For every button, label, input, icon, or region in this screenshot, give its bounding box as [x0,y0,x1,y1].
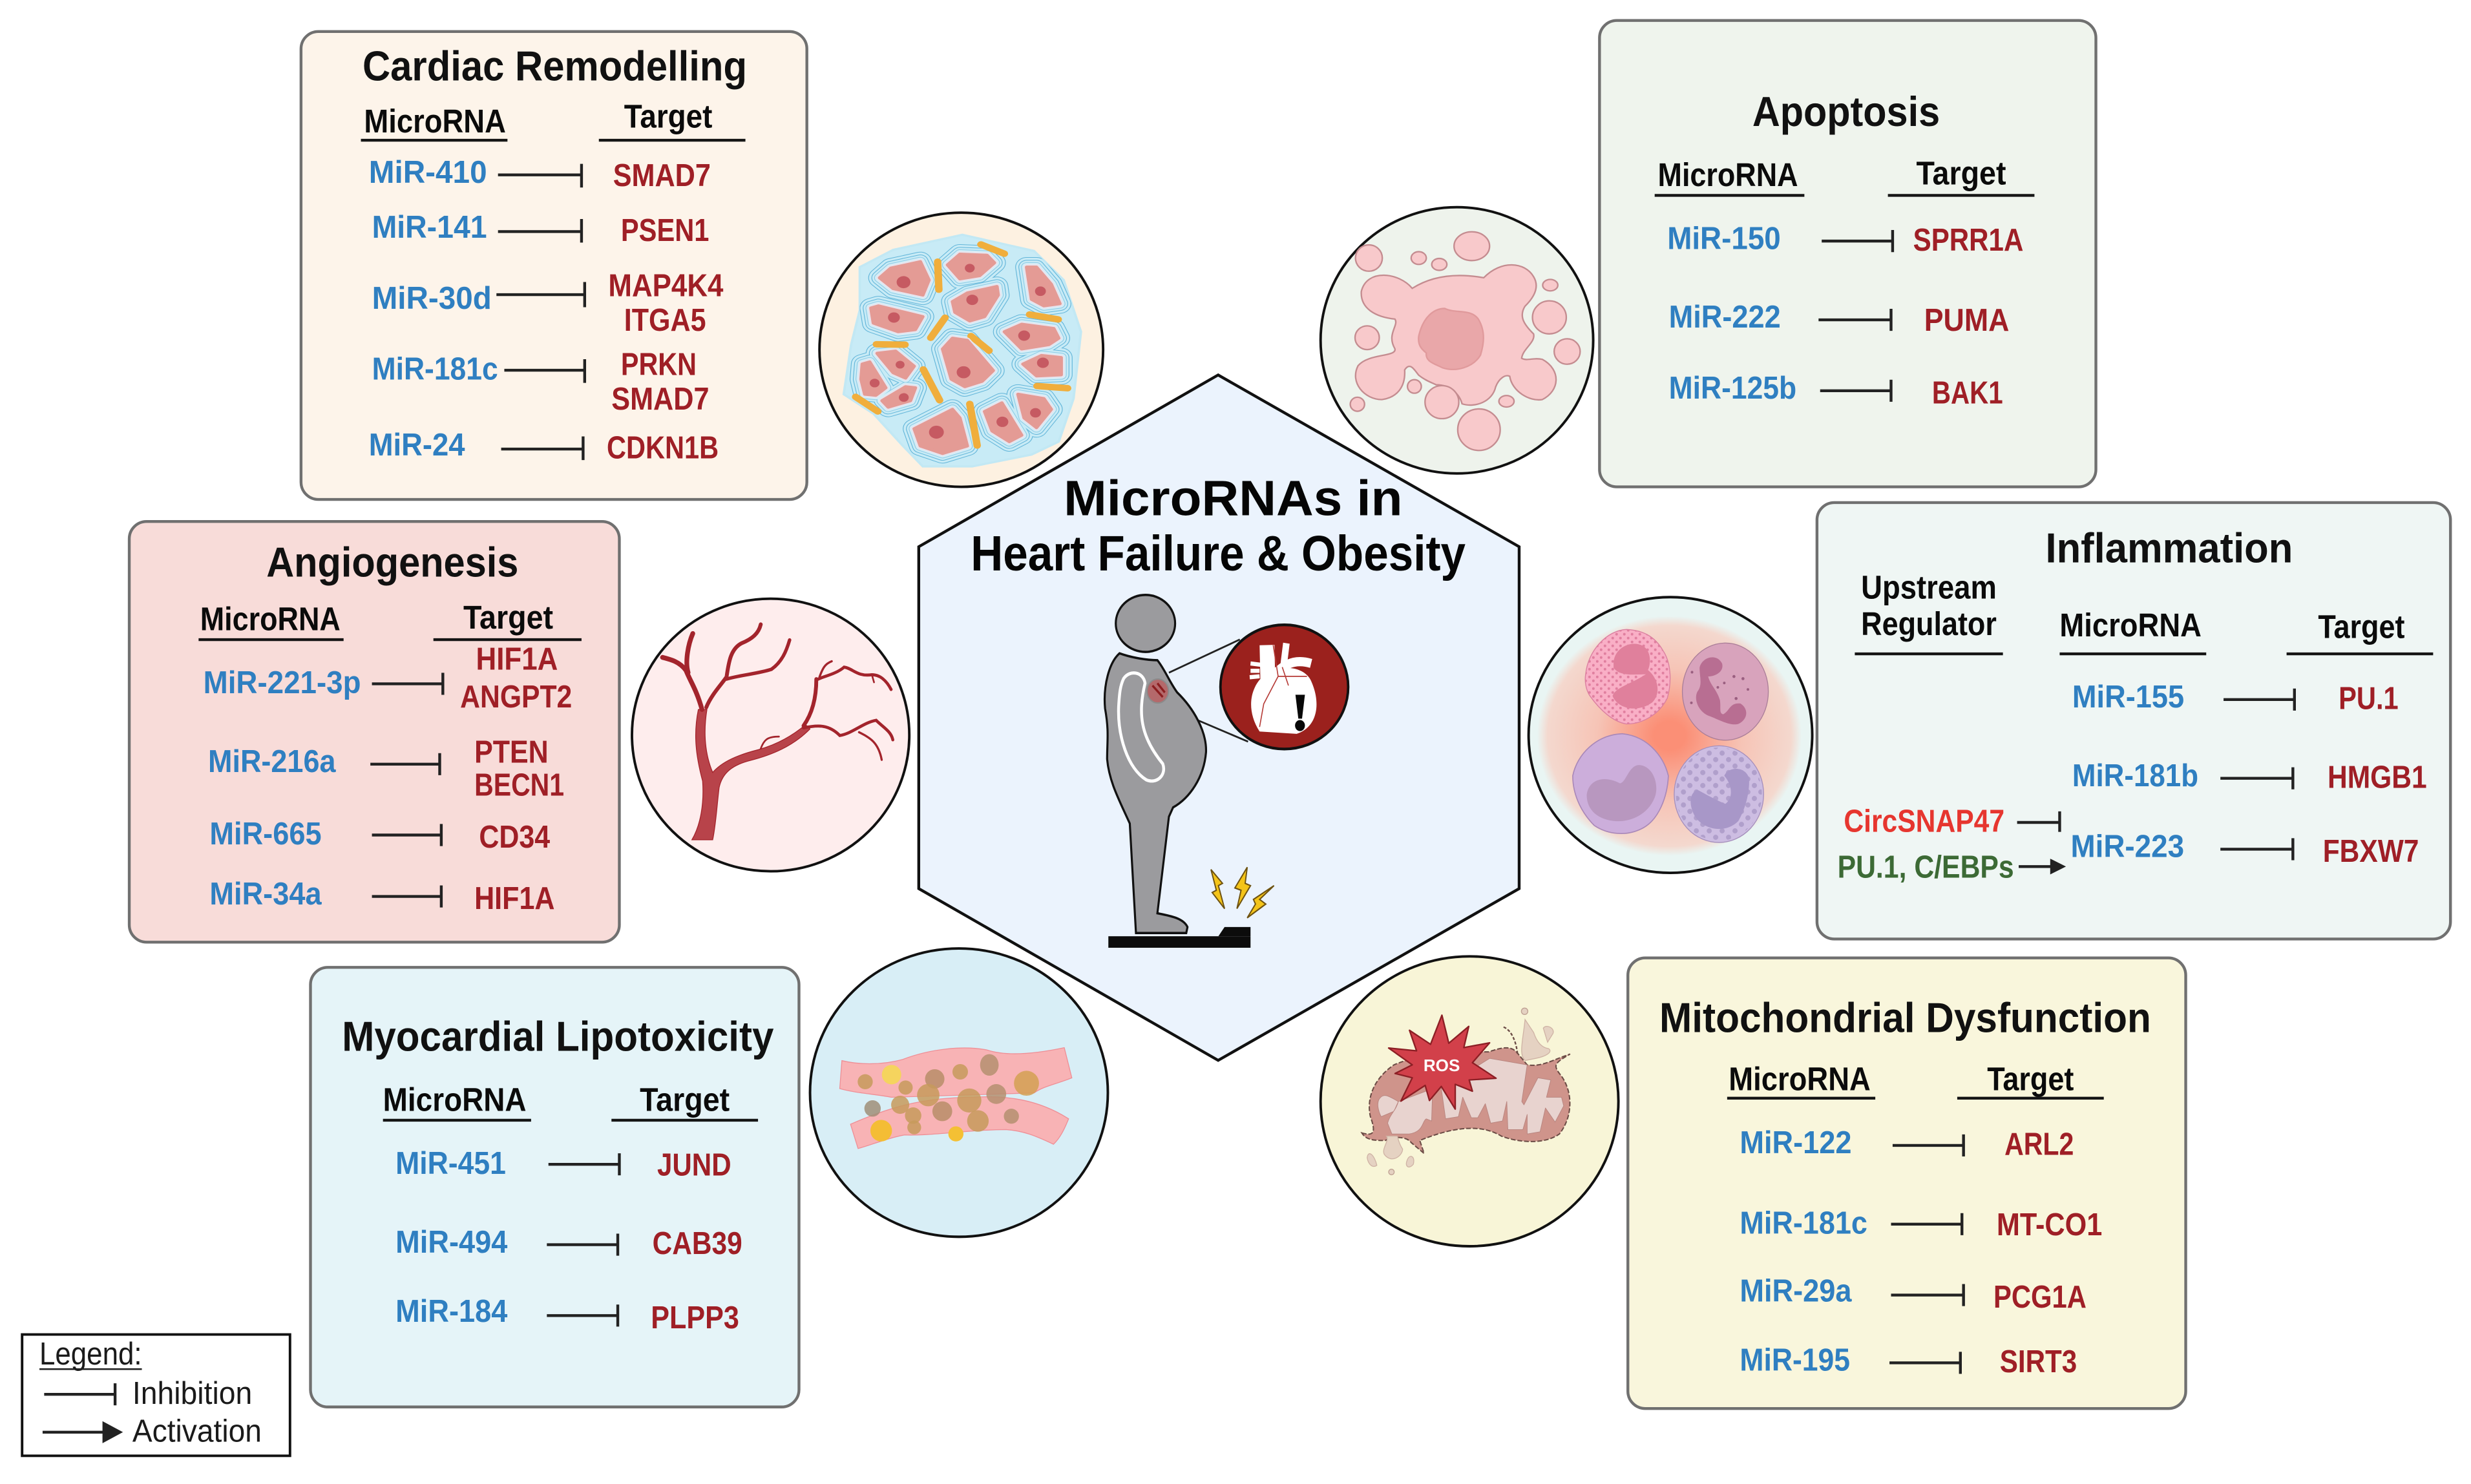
row: MiR-24 [369,428,719,466]
row: MiR-451: JUND [657,1147,731,1182]
row: MiR-125b [1669,371,2003,410]
panel: mitochondrial dysfunction [1628,958,2186,1408]
row: MiR-221-3p: ANGPT2 [460,680,572,715]
row: MiR-221-3p: HIF1A [476,642,558,676]
row: MiR-24: MiR-24 [369,428,465,463]
heading: cardiac remodelling: Cardiac Remodelling [363,43,747,89]
row: MiR-181c [1740,1206,2102,1242]
row: MiR-181c [372,347,709,417]
heading: inflammation: Inflammation [2045,525,2293,572]
row: MiR-222 [1669,300,2009,338]
cell: mauve granulocyte [1683,643,1769,740]
upstream regulator: CircSNAP47: CircSNAP47 [1844,804,2004,839]
column headers: MicroRNA [364,103,506,140]
ROS burst [1389,1015,1496,1109]
icon circle: apoptotic cell [1321,207,1593,474]
icon circle: damaged mitochondrion with ROS [1321,956,1619,1246]
legend title: Legend: [39,1337,142,1372]
heading: apoptosis: Apoptosis [1752,89,1940,135]
row: MiR-181b: HMGB1 [2328,760,2427,795]
column headers: Target [640,1081,730,1118]
row: MiR-122: MiR-122 [1740,1125,1852,1160]
column headers [1855,569,2433,654]
panel: inflammation [1817,503,2450,939]
row: MiR-494: MiR-494 [395,1225,507,1260]
row: MiR-410: MiR-410 [369,155,487,190]
row: MiR-221-3p: MiR-221-3p [204,665,361,700]
row: MiR-451 [395,1146,731,1182]
row: MiR-451: MiR-451 [395,1146,506,1181]
upstream regulator: PU.1, C/EBPs: PU.1, C/EBPs [1838,850,2014,884]
icon circle: branching blood vessel [632,599,909,872]
row: MiR-30d: ITGA5 [624,303,706,338]
cell: violet granulocyte [1674,746,1763,842]
row: MiR-184: MiR-184 [395,1294,507,1329]
row: MiR-665 [209,817,550,855]
row: MiR-122 [1740,1125,2074,1162]
legend: activation: Activation [132,1414,262,1448]
row: MiR-195 [1740,1343,2077,1379]
icon circle: lipid-laden muscle fibres [810,948,1108,1237]
icon: heart in red circle [1221,625,1348,749]
column headers: Target [624,98,712,135]
panel: apoptosis [1599,21,2096,487]
column headers: Upstream [1861,569,1997,606]
row: MiR-216a: BECN1 [474,768,564,803]
row: MiR-181b: MiR-181b [2072,758,2198,793]
row: MiR-122: ARL2 [2004,1127,2074,1162]
column headers [361,98,746,140]
row: MiR-125b: MiR-125b [1669,371,1796,406]
row: MiR-221-3p [204,642,572,715]
row: MiR-30d: MAP4K4 [608,268,723,303]
row: MiR-150: MiR-150 [1667,221,1781,256]
row: MiR-181b [2072,758,2427,795]
heading: myocardial lipotoxicity: Myocardial Lipotoxicity [342,1014,774,1060]
column headers [1655,154,2034,195]
row: MiR-150: SPRR1A [1913,223,2023,258]
row: MiR-184: PLPP3 [651,1301,739,1335]
panel: cardiac remodelling [301,32,807,499]
row: MiR-216a: PTEN [474,735,549,769]
main title: Heart Failure & Obesity [971,526,1466,581]
row: MiR-223 [2071,830,2419,869]
column headers: Regulator [1861,605,1997,642]
row: MiR-216a: MiR-216a [208,744,336,779]
legend [22,1335,290,1456]
row: MiR-222: MiR-222 [1669,300,1781,335]
icon: lightning bolts [1211,867,1274,918]
legend: inhibition [44,1376,252,1411]
row: MiR-155 [2072,680,2399,716]
row: MiR-141: MiR-141 [372,210,487,245]
row: MiR-184 [395,1294,739,1335]
row: MiR-665: CD34 [479,820,550,855]
row: MiR-181c: MiR-181c [372,352,498,387]
icon: obese person on scale with heart callout [1105,595,1348,948]
row: MiR-223: FBXW7 [2323,834,2419,869]
row: MiR-155: PU.1 [2339,681,2399,716]
row: MiR-125b: BAK1 [1932,375,2003,410]
legend: inhibition: Inhibition [132,1376,252,1411]
icon circle: cardiac tissue [819,213,1103,487]
row: MiR-150 [1667,221,2023,258]
row: MiR-29a: PCG1A [1993,1280,2087,1315]
row: MiR-494: CAB39 [653,1226,742,1261]
main title: MicroRNAs in [1064,470,1403,526]
column headers [1727,1061,2104,1098]
row: MiR-155: MiR-155 [2072,680,2184,715]
column headers: MicroRNA [1658,156,1798,193]
column headers: MicroRNA [2059,607,2202,643]
row: MiR-34a: HIF1A [474,881,554,916]
column headers: MicroRNA [1729,1061,1871,1098]
row: MiR-222: PUMA [1924,303,2009,338]
row: MiR-24: CDKN1B [607,431,719,466]
column headers: Target [2318,609,2405,645]
panel: myocardial lipotoxicity [310,967,799,1407]
row: MiR-30d: MiR-30d [372,281,492,316]
row: MiR-195: SIRT3 [2000,1344,2077,1379]
row: MiR-665: MiR-665 [209,817,322,852]
row: MiR-216a [208,735,564,803]
row: MiR-181c: MT-CO1 [1997,1207,2102,1242]
column headers: Target [1987,1061,2074,1098]
row: MiR-34a: MiR-34a [209,877,322,912]
row: MiR-141: PSEN1 [621,213,709,248]
row: MiR-29a [1740,1273,2087,1315]
row: MiR-181c: SMAD7 [611,382,709,417]
heading: angiogenesis: Angiogenesis [266,539,518,586]
cell: pink granulocyte [1585,629,1670,724]
heading: mitochondrial dysfunction: Mitochondrial Dysfunction [1659,994,2151,1041]
central hexagon [919,375,1519,1060]
icon circle: immune cells [1529,597,1813,873]
row: MiR-223: MiR-223 [2071,830,2184,864]
row: MiR-410: SMAD7 [613,158,711,193]
row: MiR-34a [209,877,554,916]
main title [971,470,1466,581]
row: MiR-29a: MiR-29a [1740,1273,1852,1308]
column headers: MicroRNA [383,1081,527,1118]
column headers: Target [1917,154,2006,191]
row: MiR-30d [372,268,723,338]
row: MiR-410 [369,155,711,193]
cell: lilac monocyte [1573,734,1668,833]
column headers: MicroRNA [200,600,341,637]
ROS burst: ROS [1424,1056,1460,1075]
row: MiR-181c: MiR-181c [1740,1206,1867,1240]
row: MiR-494 [395,1225,742,1261]
panel: angiogenesis [129,521,619,942]
row: MiR-141 [372,210,709,248]
column headers [198,599,582,640]
column headers: Target [463,599,553,636]
legend: activation [43,1414,262,1448]
row: MiR-181c: PRKN [621,347,697,382]
row: MiR-195: MiR-195 [1740,1343,1850,1378]
column headers [383,1081,758,1120]
